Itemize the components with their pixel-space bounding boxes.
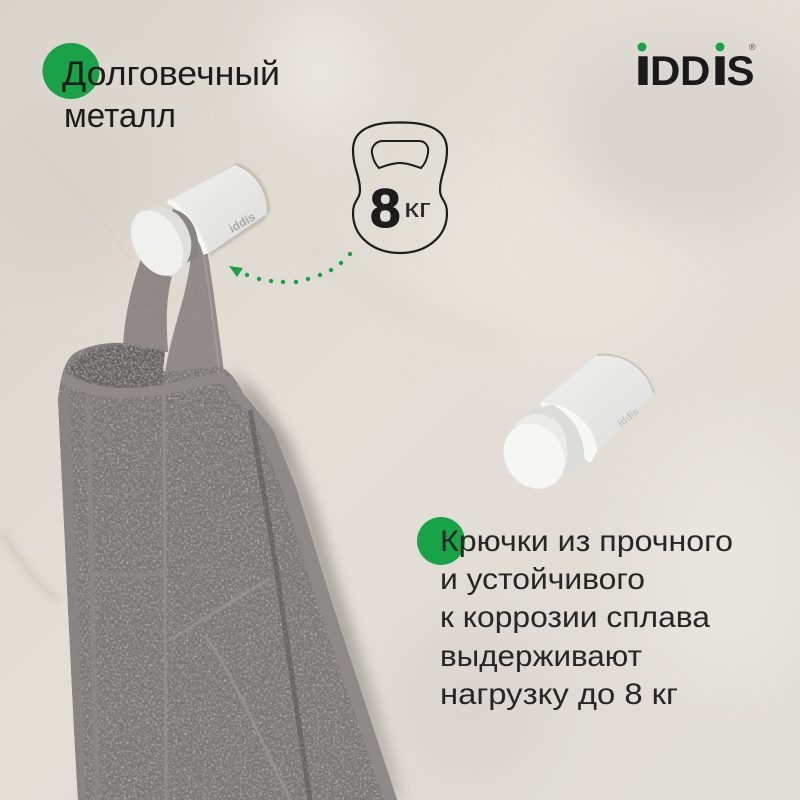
hook 1 cap side [140,207,191,277]
towel inner fold [68,345,165,389]
hook 2 logo: iddis [616,406,642,429]
description text: к коррозии сплава [440,601,710,634]
logo: IDDIS: S [726,47,755,94]
icon: kettlebell 8 kg [353,122,447,253]
towel loop [123,208,224,372]
logo: IDDIS [634,42,756,94]
hook 1 with cap [120,163,270,285]
description text [417,517,733,711]
heading: durable metal [42,43,280,135]
heading: durable metal: Долговечный [62,55,280,93]
towel [58,343,397,800]
icon: kettlebell 8 kg: 8 [370,177,401,239]
logo: IDDIS: D [650,47,680,94]
towel shadow on wall [228,368,405,800]
dotted arrow [229,252,352,284]
logo green dots [638,42,724,52]
logo: IDDIS: I [711,47,729,94]
heading: durable metal: металл [64,97,176,135]
hook logo: iddis [226,209,258,236]
description text: выдерживают [440,640,642,673]
hook 2 [491,355,654,500]
hook 2 collar [540,403,597,463]
logo: IDDIS: I [634,47,652,94]
logo: IDDIS: D [680,47,710,94]
towel hem border [62,376,392,800]
description text: Крючки из прочного [440,525,733,558]
icon: kettlebell 8 kg: кг [404,193,431,223]
description text: и устойчивого [440,563,645,596]
description text: нагрузку до 8 кг [440,678,678,711]
logo: IDDIS: ® [749,42,756,52]
